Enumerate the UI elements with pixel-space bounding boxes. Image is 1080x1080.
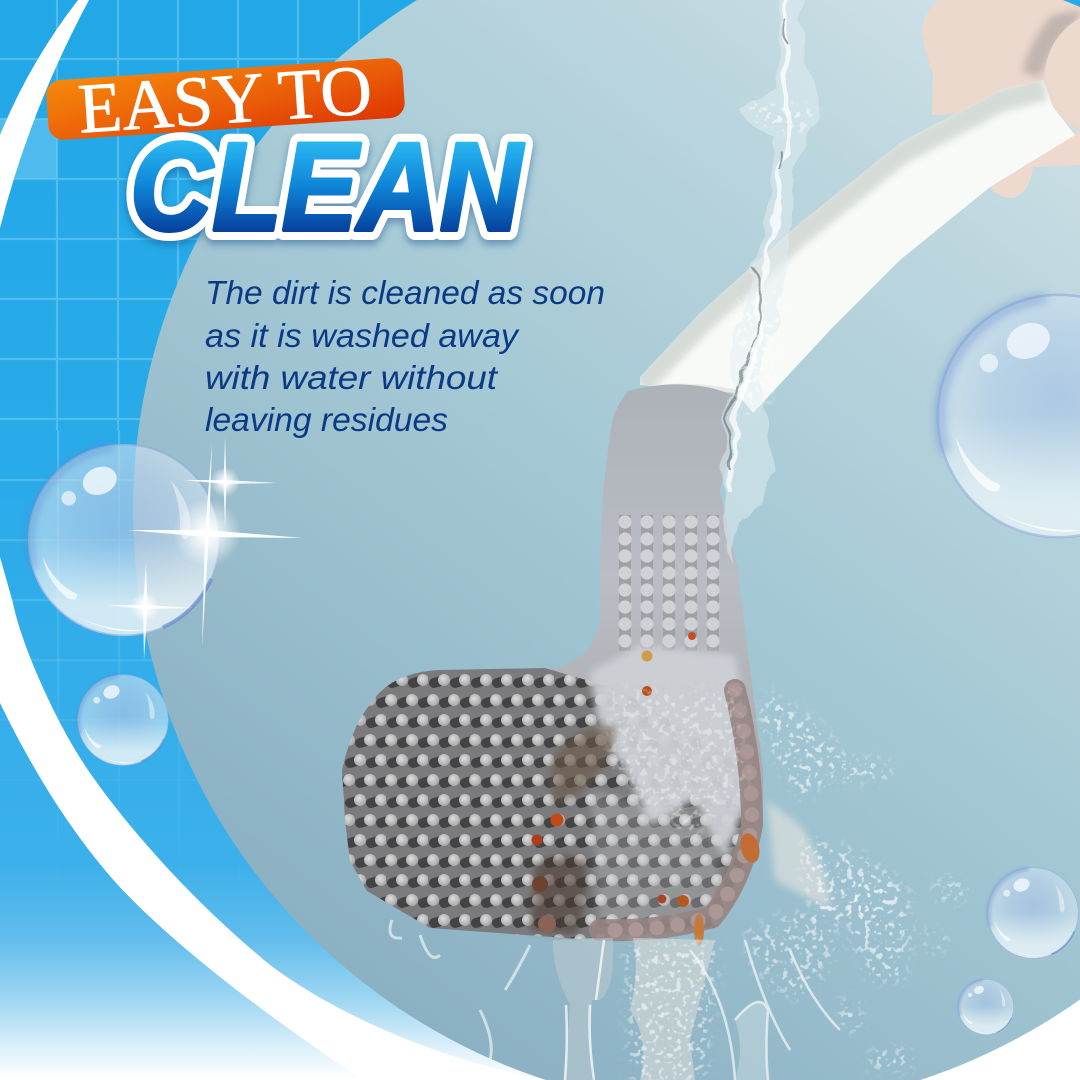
brush head: [340, 384, 763, 946]
soap bubble large left: [28, 444, 220, 636]
water splash on right: [745, 690, 965, 1070]
description text: leaving residues: [205, 401, 448, 438]
water texture on head: [610, 690, 745, 840]
white curved band lower: [0, 557, 547, 1080]
dirt patch lower: [530, 856, 586, 935]
upper bristle rows: [614, 515, 724, 651]
washed bristles lower right: [590, 790, 720, 930]
water dripping below brush: [390, 920, 840, 1080]
smoky washed area upper right: [590, 645, 755, 860]
dirt patch upper: [552, 725, 615, 802]
heading: clean: CLEAN: [130, 118, 524, 257]
dirty rim on right edge: [600, 690, 752, 930]
description text: The dirt is cleaned as soon: [205, 274, 605, 311]
soap bubble large right: [937, 294, 1080, 538]
sparkle lower: [107, 563, 193, 660]
soap bubble small left: [77, 674, 169, 766]
dirt specks: [532, 632, 763, 946]
sparkle main: [128, 443, 303, 647]
heading: clean: CLEAN: [130, 118, 524, 257]
description text: [205, 274, 605, 438]
soap bubble bottom right: [958, 979, 1014, 1035]
head silicone body: [345, 384, 763, 939]
badge: easy to: EASY TO: [76, 51, 374, 149]
description text: as it is washed away: [205, 317, 521, 354]
falling water stream: [722, 0, 820, 560]
hand holding the brush: [922, 0, 1080, 198]
sparkle upper: [183, 437, 278, 530]
soap bubble lower right: [987, 867, 1079, 959]
white corner lower right: [870, 985, 1080, 1080]
brush handle: [630, 70, 1080, 420]
white curved band upper: [0, 0, 89, 228]
lower bristle pad: [340, 665, 750, 945]
description text: with water without: [205, 359, 499, 396]
